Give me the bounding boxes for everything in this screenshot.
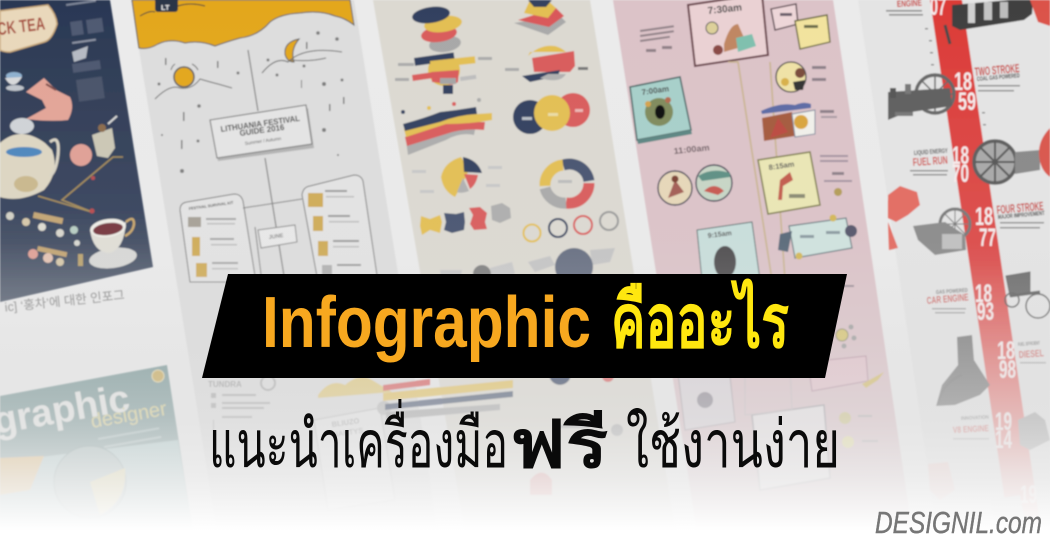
heading card: Summer / Autumn xyxy=(244,136,282,146)
strip years: 18 xyxy=(975,280,992,308)
panel: lithuania festival guide xyxy=(131,0,440,550)
yellow sky header xyxy=(132,0,354,48)
box 7:00 cave xyxy=(630,77,692,144)
machine: two stroke xyxy=(888,75,954,120)
panel: chart templates poster xyxy=(373,0,680,550)
icon: tea cup with saucer xyxy=(88,217,138,271)
heading card xyxy=(210,105,314,161)
icon: sugar bowl and pink lid xyxy=(70,116,117,166)
lower list: tundra xyxy=(208,376,275,460)
strip years: 70 xyxy=(952,160,969,188)
chart: donut xyxy=(545,164,589,203)
engine headings: FUEL RUN xyxy=(912,155,948,169)
lower boxes xyxy=(677,358,878,490)
box 9:30 mint: 9:15am xyxy=(707,230,732,240)
engine headings: INNOVATION xyxy=(961,415,989,422)
icon: small tea cup xyxy=(5,72,24,91)
june box xyxy=(258,225,297,248)
machine: carriage xyxy=(1005,272,1050,318)
comic panel vertical line xyxy=(728,62,785,280)
strip years: 77 xyxy=(979,224,996,252)
engine headings: LIQUID ENERGY xyxy=(914,148,948,157)
small tea items xyxy=(6,212,83,266)
lower card: bliuzo naktys: NAKTYS xyxy=(332,426,364,439)
title banner xyxy=(202,274,847,378)
box 8:30 pale yellow xyxy=(758,152,852,214)
card: festival list left xyxy=(180,194,256,282)
strip years: 59 xyxy=(958,88,976,116)
panel: engine timeline poster xyxy=(858,0,1050,550)
red timeline strip xyxy=(930,0,1041,535)
central timeline line xyxy=(248,50,285,282)
connector lines xyxy=(243,199,302,282)
box 9:30 mint xyxy=(697,222,760,280)
panel: timeline comic poster xyxy=(613,0,915,550)
machine: top engine xyxy=(945,0,1050,44)
heading card: LITHUANIA FESTIVAL xyxy=(220,114,300,134)
chart: pyramid xyxy=(514,0,566,35)
icon: moon behind hills xyxy=(262,39,342,73)
strip years: 18 xyxy=(954,68,972,96)
lower card: bliuzo naktys xyxy=(314,377,395,510)
title plaque xyxy=(0,5,57,52)
strip years: 14 xyxy=(995,426,1012,454)
subtitle: recommend tools: แนะนำเครื่องมือ xyxy=(209,399,508,481)
title: thai question: คืออะไร xyxy=(611,277,789,363)
small percent tags xyxy=(771,4,830,49)
chart: venn circles xyxy=(513,93,590,134)
subtitle: easy to use: ใช้งานง่าย xyxy=(626,407,840,481)
heading box 7:30 xyxy=(688,0,768,66)
chart: exploded pie xyxy=(412,157,502,197)
strip years: 18 xyxy=(975,203,993,231)
icon: sun behind hills xyxy=(155,64,232,99)
strip years xyxy=(930,0,1037,509)
engine headings xyxy=(897,0,1045,435)
machine: fuel run flywheel xyxy=(974,128,1050,183)
timeline connector xyxy=(38,157,123,214)
box 7:00 cave: 7:00am xyxy=(641,84,670,97)
notes and dots xyxy=(158,31,344,173)
small paragraph lines xyxy=(886,10,1046,440)
title: infographic: Infographic xyxy=(262,283,591,363)
world map bubble xyxy=(440,248,615,286)
strip years: 98 xyxy=(999,356,1016,384)
icon: man and coffee circle xyxy=(776,62,826,92)
box 8:30 pale yellow: 8:15am xyxy=(768,159,795,172)
machine: v8 and engraving xyxy=(928,412,1050,522)
lower notes under title bar xyxy=(808,275,884,391)
lower list: tundra: TUNDRA xyxy=(208,380,242,389)
phone note card xyxy=(778,214,857,260)
chart: wavy stacked bands xyxy=(401,98,492,155)
text block top left xyxy=(640,25,674,52)
card: festival list left: FESTIVAL SURVIVAL KIT xyxy=(189,201,234,211)
engine headings: GAS POWERED xyxy=(936,288,968,296)
panel: infographic designer poster xyxy=(0,365,195,550)
red floral engraving xyxy=(888,186,920,250)
icon: pink teapot xyxy=(26,78,72,121)
strip years: 19 xyxy=(1020,481,1037,509)
machine: four stroke xyxy=(913,209,970,255)
yellow sky header: LT xyxy=(161,3,170,12)
chart: lightbulb bars xyxy=(395,52,492,94)
panel: infographic designer poster: designer xyxy=(89,398,169,433)
machine: diesel beam engine xyxy=(936,335,990,406)
engine headings: CAR ENGINE xyxy=(926,292,969,307)
banner shape xyxy=(202,274,847,378)
strip years: 18 xyxy=(952,142,969,170)
heading box 7:30: 7:30am xyxy=(707,2,743,17)
card: festival list right xyxy=(302,175,378,282)
heading 11:00: 11:00am xyxy=(673,142,710,156)
chart: stacked discs xyxy=(411,4,463,54)
engine headings: COAL GAS POWERED xyxy=(977,73,1020,83)
subtitle: free: ฟรี xyxy=(510,407,608,481)
comic burger scene xyxy=(761,103,837,141)
strip years: 19 xyxy=(995,408,1012,436)
strip years: 93 xyxy=(977,298,994,326)
icon: white teapot xyxy=(0,118,58,199)
caption: korean poster title: ic] ‘홍차’에 대한 인포그 xyxy=(4,288,125,315)
panel: black tea poster xyxy=(0,0,153,302)
progress rings xyxy=(524,212,618,242)
circle illustrations xyxy=(658,165,732,205)
june box: JUNE xyxy=(268,233,284,241)
subtitle xyxy=(209,399,840,481)
lower colour bars xyxy=(383,363,623,495)
lower card: bliuzo naktys: BLIUZO xyxy=(331,416,360,429)
puzzle pieces xyxy=(420,203,511,235)
chart: half circle bars xyxy=(505,46,588,82)
heading card: GUIDE 2016 xyxy=(239,123,285,138)
engine headings: V8 ENGINE xyxy=(953,423,989,435)
strip years: 18 xyxy=(997,337,1015,365)
